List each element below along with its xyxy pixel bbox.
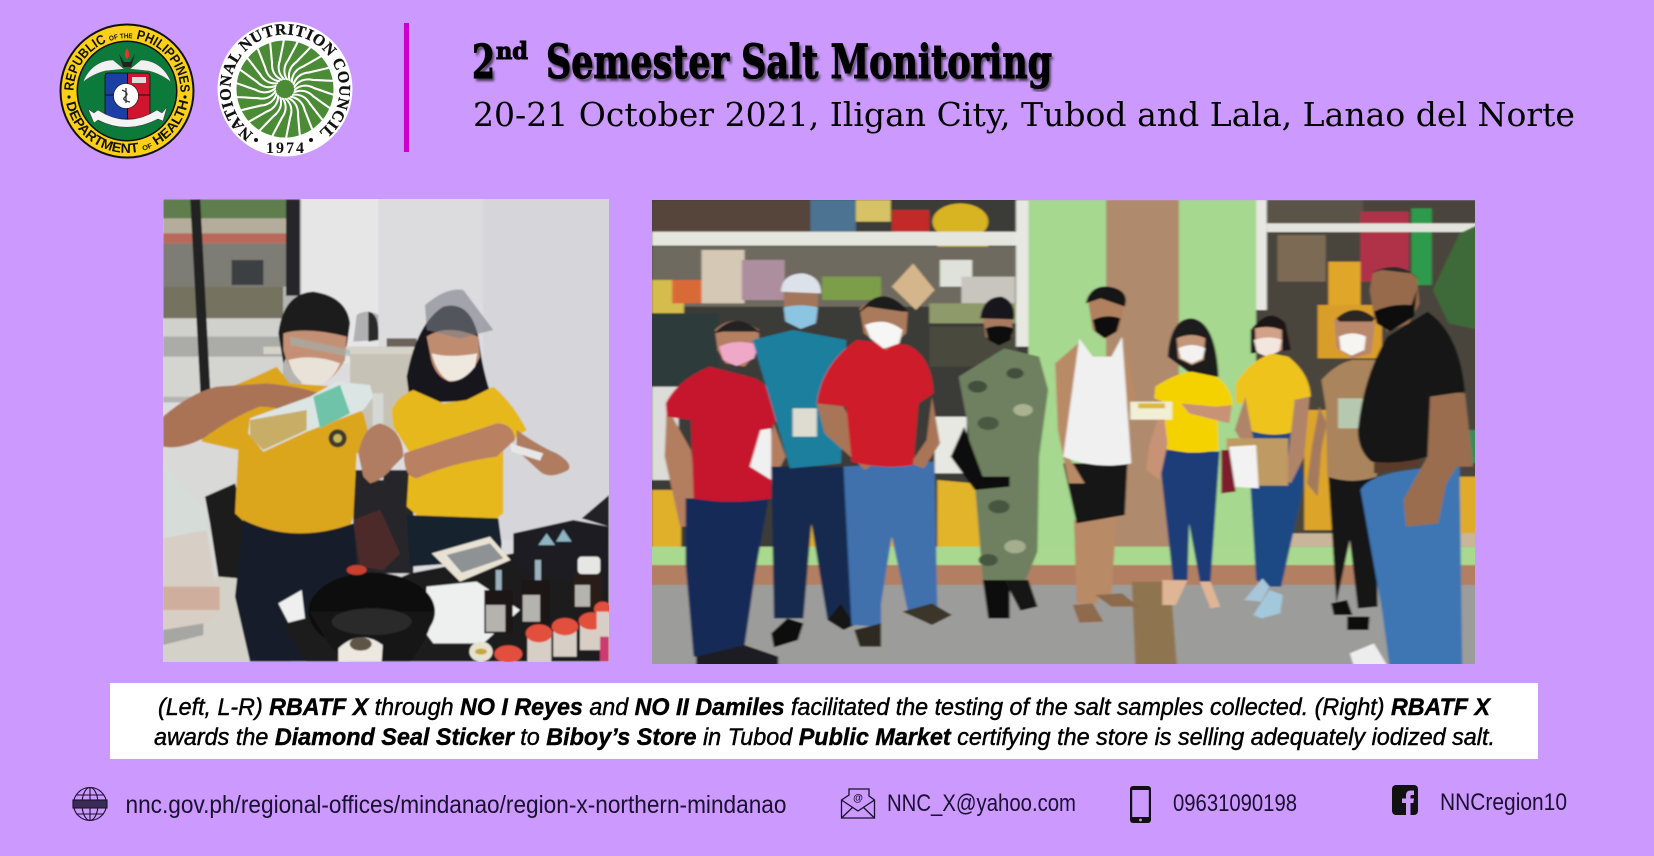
storefront right xyxy=(1256,200,1481,550)
caption box: (Left, L-R) RBATF X through NO I Reyes and NO II Damiles facilitated the testing of the salt samples collected. (Right) RBATF X xyxy=(158,694,1492,721)
meter xyxy=(432,537,511,582)
storefront left xyxy=(640,190,1029,557)
person 4: officer in camouflage xyxy=(951,297,1048,618)
person 7: second woman in yellow with folder xyxy=(1221,316,1311,618)
logo: National Nutrition Council seal: NATIONAL NUTRITION COUNCIL xyxy=(220,24,350,142)
person 5: store owner in white tank top xyxy=(1055,287,1138,623)
person 8: woman in brown with face shield xyxy=(1307,310,1382,630)
pillars xyxy=(1028,200,1257,582)
person 6: woman in yellow holding sticker xyxy=(1130,318,1233,608)
logo: Department of Health seal xyxy=(60,24,194,158)
person 2: man in teal xyxy=(752,273,854,647)
icon: globe xyxy=(72,787,108,821)
window xyxy=(163,199,301,402)
reagent bottles xyxy=(484,557,602,633)
title: 2nd Semester Salt Monitoring: nd xyxy=(496,38,528,65)
icon: Facebook xyxy=(1392,785,1418,815)
icon: email envelope xyxy=(840,788,876,819)
tape roll xyxy=(338,637,383,662)
photo: two staff testing salt samples xyxy=(163,199,609,662)
icon: email envelope: @ xyxy=(853,793,863,804)
table xyxy=(283,553,609,662)
bags left xyxy=(163,463,247,645)
bowl xyxy=(308,565,435,662)
person 3: man in red xyxy=(817,296,952,647)
logo: Department of Health seal: REPUBLIC OF THE PHILIPPINES xyxy=(64,30,190,92)
person 1: woman in red xyxy=(665,321,786,670)
logo: National Nutrition Council seal: 1974 xyxy=(266,140,304,157)
caption box: awards the Diamond Seal Sticker to Biboy’s Store in Tubod Public Market certifying the store is selling adequately iodized salt. xyxy=(154,724,1495,751)
dark gap between the women xyxy=(353,470,413,573)
brown bag xyxy=(353,510,400,570)
photo: group awarding the Diamond Seal Sticker at the store xyxy=(652,200,1475,664)
title: 2nd Semester Salt Monitoring: 2 xyxy=(472,35,495,90)
title: 2nd Semester Salt Monitoring: 2 xyxy=(474,38,497,92)
case xyxy=(513,495,609,593)
papers xyxy=(423,582,520,643)
vertical divider xyxy=(404,23,409,152)
cabinet and kettle xyxy=(263,312,417,433)
logo: Department of Health seal: DEPARTMENT OF HEALTH xyxy=(66,100,188,153)
person 9: man in black shirt xyxy=(1350,267,1473,670)
second woman xyxy=(392,289,569,567)
sample cups xyxy=(469,602,611,663)
wall base and floor xyxy=(640,547,1481,672)
wall xyxy=(150,190,630,670)
first woman xyxy=(163,292,403,662)
icon: mobile phone xyxy=(1130,786,1151,823)
caption box xyxy=(110,683,1538,759)
subtitle: date and place: 20-21 October 2021, Iligan City, Tubod and Lala, Lanao del Norte xyxy=(473,95,1575,134)
